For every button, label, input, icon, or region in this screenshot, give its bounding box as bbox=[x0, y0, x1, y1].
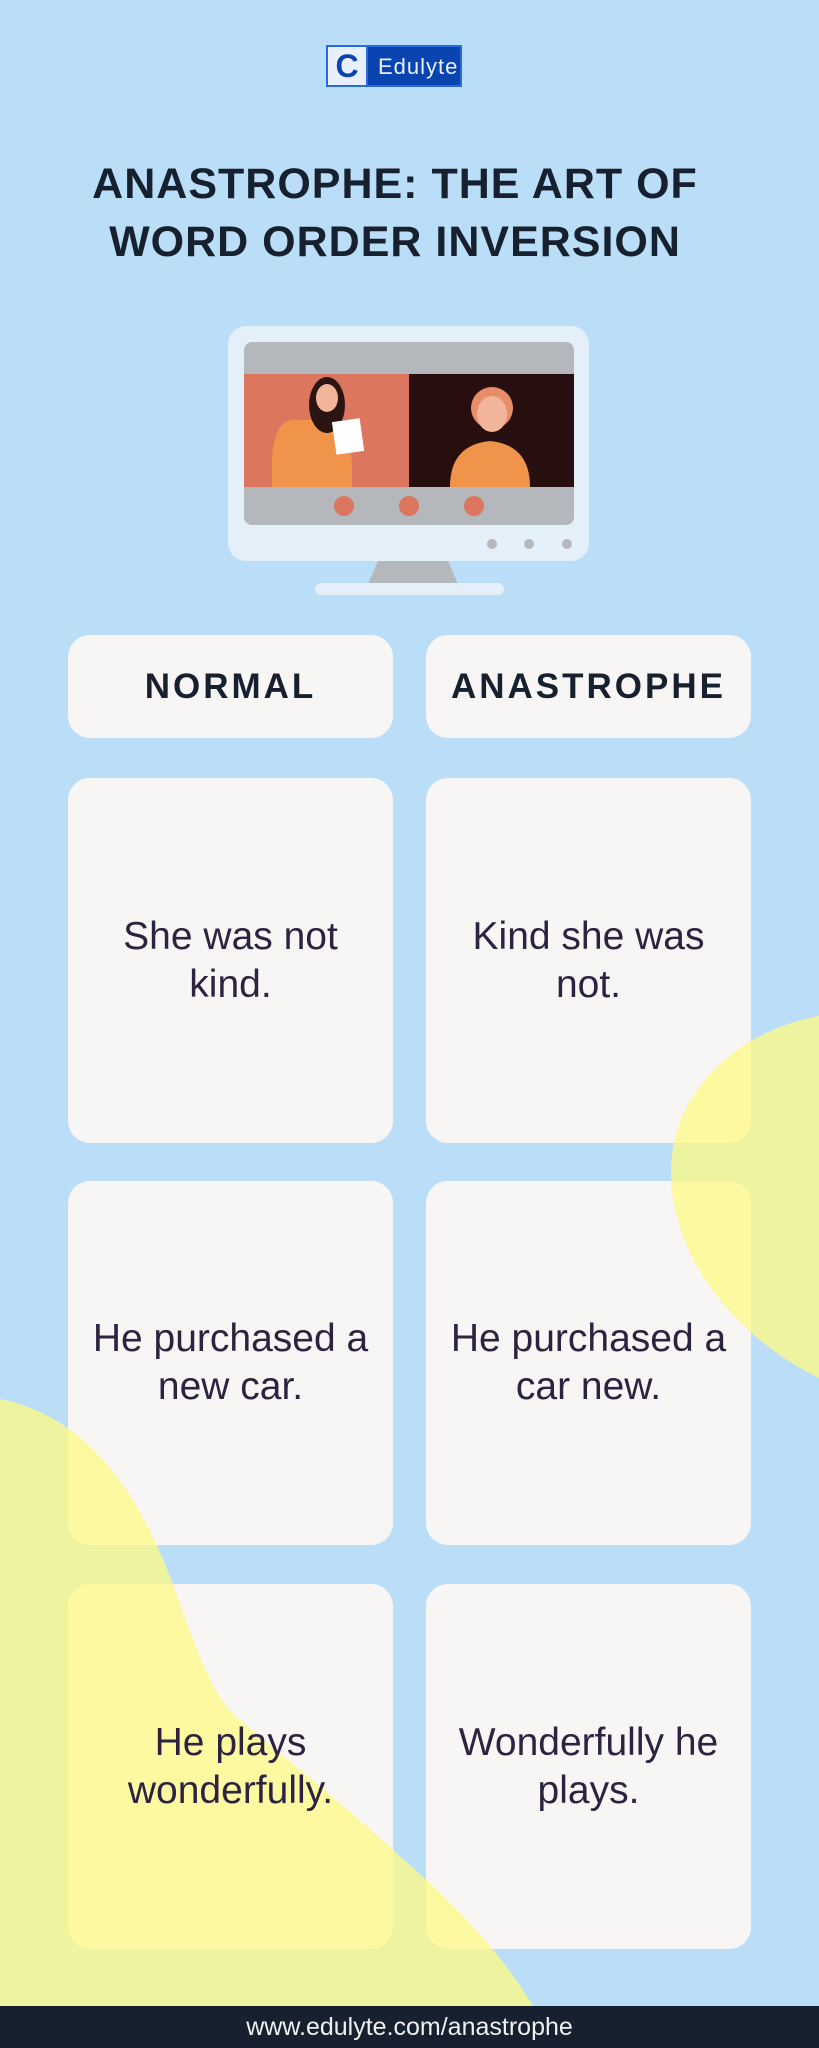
title bbox=[92, 160, 698, 266]
illustration: video call monitor bbox=[228, 326, 589, 595]
header: anastrophe bbox=[426, 635, 751, 738]
title: ANASTROPHE: THE ART OF bbox=[92, 160, 698, 208]
card: anastrophe 3 bbox=[426, 1584, 751, 1949]
card: anastrophe 1 bbox=[426, 778, 751, 1143]
card: anastrophe 3: Wonderfully he bbox=[459, 1720, 718, 1764]
header: normal bbox=[68, 635, 393, 738]
card: anastrophe 2 bbox=[426, 1181, 751, 1545]
card: normal 3 bbox=[68, 1584, 393, 1949]
card: anastrophe 2: car new. bbox=[516, 1365, 661, 1408]
logo bbox=[326, 45, 462, 87]
left person bbox=[272, 420, 352, 487]
card: normal 1: She was not bbox=[123, 914, 338, 958]
card: normal 3: He plays bbox=[155, 1720, 306, 1764]
right person bbox=[450, 441, 530, 487]
icon: logo mark: C bbox=[335, 48, 359, 84]
card: normal 1: kind. bbox=[189, 962, 272, 1006]
card: normal 2: He purchased a bbox=[93, 1317, 368, 1360]
card: normal 2: new car. bbox=[158, 1365, 303, 1408]
card: anastrophe 1: Kind she was bbox=[473, 914, 704, 958]
card: anastrophe 2: He purchased a bbox=[451, 1317, 726, 1360]
card: normal 2 bbox=[68, 1181, 393, 1545]
footer bbox=[0, 2006, 819, 2048]
header: normal: NORMAL bbox=[145, 666, 316, 706]
card: normal 3: wonderfully. bbox=[128, 1768, 333, 1812]
card: anastrophe 1: not. bbox=[556, 962, 621, 1006]
icon: logo mark bbox=[328, 47, 368, 85]
card: normal 1 bbox=[68, 778, 393, 1143]
footer: www.edulyte.com/anastrophe bbox=[246, 2013, 573, 2041]
header: anastrophe: ANASTROPHE bbox=[451, 666, 726, 706]
logo text: Edulyte bbox=[378, 54, 458, 79]
title: WORD ORDER INVERSION bbox=[109, 218, 681, 266]
card: anastrophe 3: plays. bbox=[538, 1768, 639, 1812]
